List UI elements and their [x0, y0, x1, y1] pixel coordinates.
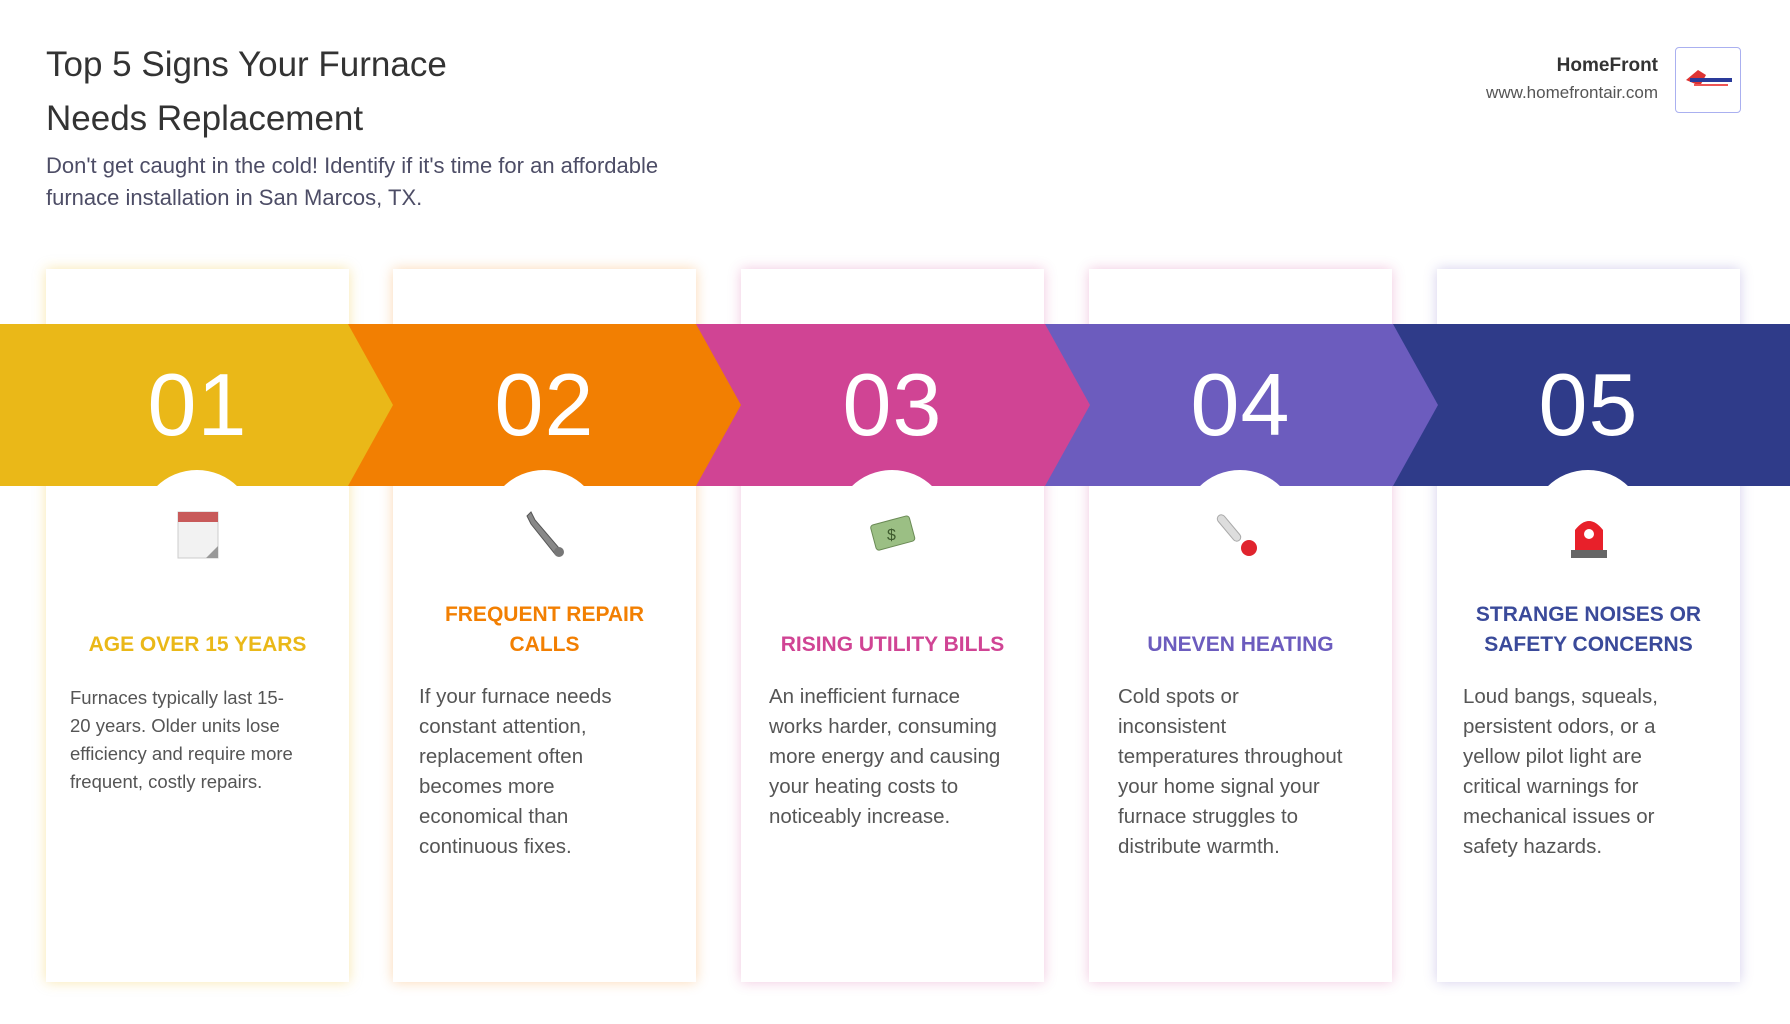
icon: wrench: [526, 511, 564, 557]
card 5: [1437, 269, 1740, 982]
icon: money: $: [887, 527, 896, 544]
body 1: Furnaces typically last 15-20 years. Older units lose efficiency and require more frequent, costly repairs.: [70, 687, 293, 792]
card 3: [741, 269, 1044, 982]
title 2: FREQUENT REPAIR: [445, 603, 644, 626]
number 04: 04: [1191, 355, 1290, 454]
icon: money: [870, 516, 916, 551]
icon: thermometer: [1216, 514, 1257, 556]
number 01: 01: [148, 355, 247, 454]
icon: siren: [1571, 521, 1607, 558]
number 02: 02: [495, 355, 594, 454]
icon: calendar: [178, 512, 218, 558]
subtitle: Don't get caught in the cold! Identify if it's time for an affordable furnace installation in San Marcos, TX.: [46, 153, 658, 210]
title 3: RISING UTILITY BILLS: [781, 633, 1004, 656]
number 03: 03: [843, 355, 942, 454]
title 5: [1476, 603, 1701, 656]
title 2: CALLS: [510, 633, 580, 656]
logo: [1675, 47, 1741, 113]
brand block: [1486, 47, 1741, 113]
body 2: If your furnace needs constant attention, replacement often becomes more economical than continuous fixes.: [419, 685, 612, 858]
title: Top 5 Signs Your Furnace Needs Replacement: [46, 45, 447, 138]
body 5: Loud bangs, squeals, persistent odors, or a yellow pilot light are critical warnings for mechanical issues or safety hazards.: [1463, 685, 1658, 858]
card 1: [46, 269, 349, 982]
card 4: [1089, 269, 1392, 982]
title 2: [445, 603, 644, 656]
brand url: www.homefrontair.com: [1486, 83, 1658, 102]
title 5: SAFETY CONCERNS: [1484, 633, 1693, 656]
brand name: HomeFront: [1557, 55, 1658, 76]
card 2: [393, 269, 696, 982]
title 1: AGE OVER 15 YEARS: [89, 633, 306, 656]
body 4: Cold spots or inconsistent temperatures throughout your home signal your furnace struggles to distribute warmth.: [1118, 685, 1342, 858]
title 5: STRANGE NOISES OR: [1476, 603, 1701, 626]
title 4: UNEVEN HEATING: [1147, 633, 1334, 656]
body 3: An inefficient furnace works harder, consuming more energy and causing your heating costs to noticeably increase.: [769, 685, 1000, 828]
number 05: 05: [1539, 355, 1638, 454]
